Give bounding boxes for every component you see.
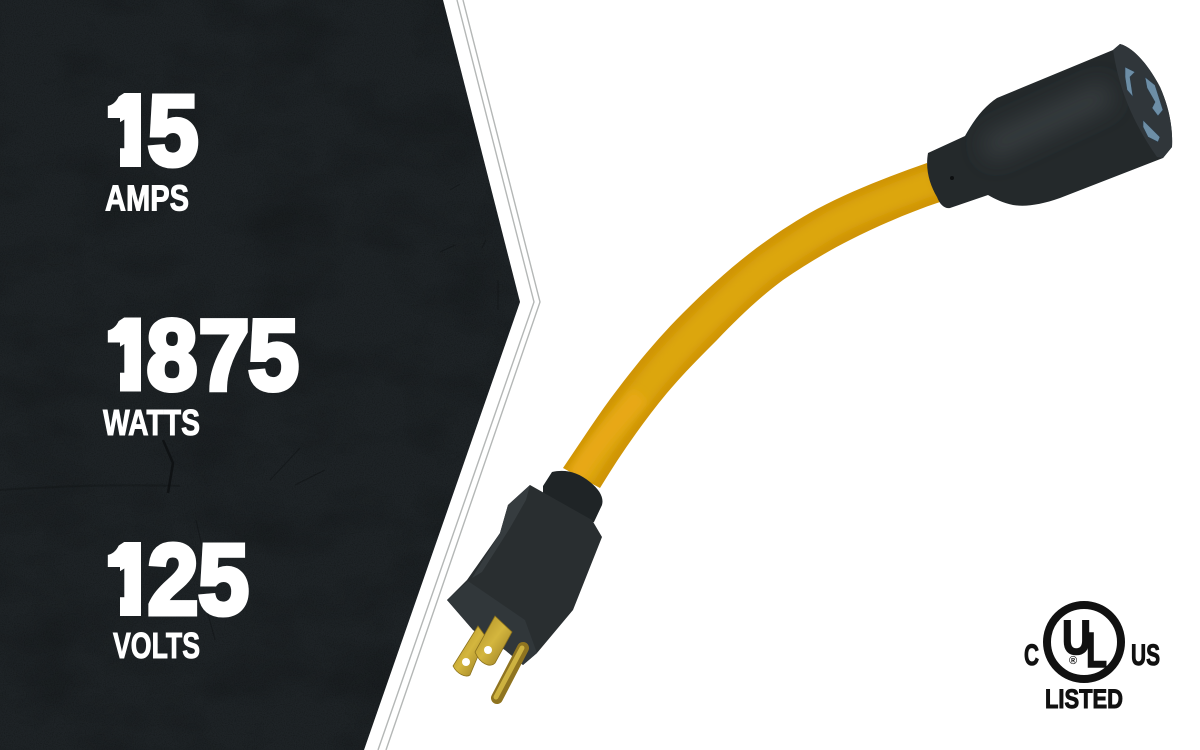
us mark: US [1131, 639, 1160, 672]
number 125: 2 [148, 524, 198, 636]
plug grip ridge [472, 485, 530, 578]
receptacle front face [1113, 44, 1172, 158]
UL letters: U [1062, 612, 1091, 665]
UL letters: L [1086, 624, 1107, 678]
number 1875 [108, 317, 299, 393]
listed label: LISTED [1045, 684, 1123, 714]
product: adapter cord [447, 44, 1172, 698]
c mark: C [1024, 639, 1039, 672]
number 1875: 7 [198, 300, 250, 412]
number 1875: 8 [146, 300, 198, 412]
number 125: 1 [108, 524, 163, 636]
yellow cable [563, 163, 940, 488]
label amps: AMPS [105, 178, 189, 218]
number 125: 5 [198, 524, 249, 636]
receptacle highlight [985, 92, 1110, 150]
UL letters [1062, 612, 1107, 678]
number 125 [108, 542, 249, 618]
number 15: 5 [148, 75, 198, 187]
label watts: WATTS [103, 402, 200, 443]
number 15 [108, 75, 198, 187]
double chevron outline [378, 0, 540, 750]
label volts: VOLTS [113, 625, 200, 666]
number 1875: 5 [248, 300, 299, 412]
plug body [447, 471, 602, 665]
stat: 15 amps [105, 75, 198, 218]
UL letters: ® [1069, 655, 1077, 667]
crack mark [163, 440, 173, 493]
plug front face [447, 581, 537, 665]
receptacle slots [1125, 67, 1163, 142]
stat: 1875 watts [102, 317, 299, 436]
number 15: 1 [108, 75, 163, 187]
number 1875: 1 [108, 300, 163, 412]
plug prongs [453, 616, 523, 698]
UL ring [1047, 605, 1121, 679]
receptacle connector [927, 44, 1172, 208]
panel: dark textured specs panel [0, 0, 530, 750]
UL listed certification mark [1024, 605, 1160, 714]
stat: 125 volts [108, 542, 249, 659]
